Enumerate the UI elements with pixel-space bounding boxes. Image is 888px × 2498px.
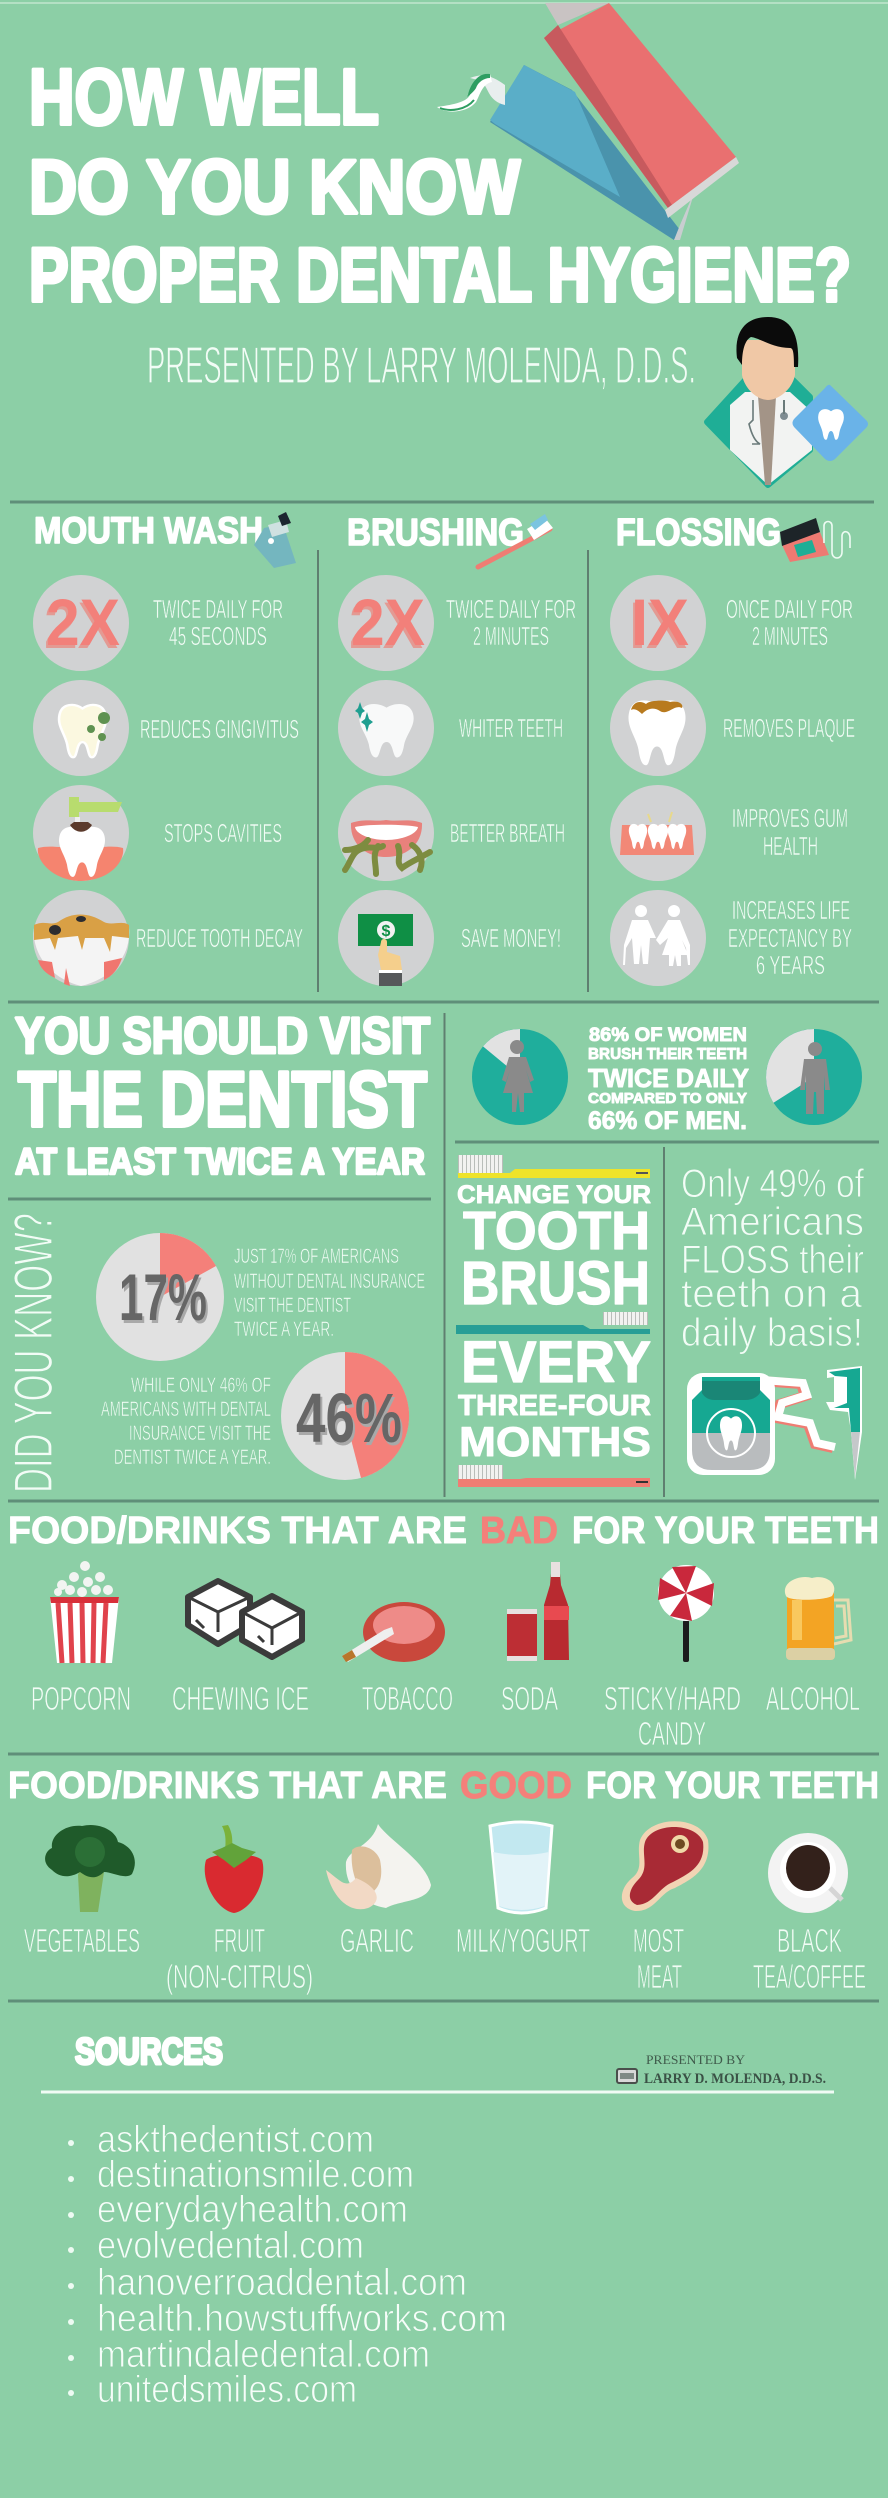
label bbox=[633, 1922, 684, 1995]
title: HOW WELL bbox=[29, 52, 379, 141]
logo: presented by larry d. molenda: LARRY D. MOLENDA, D.D.S. bbox=[644, 2071, 826, 2087]
stat text: TWICE DAILY bbox=[588, 1063, 749, 1093]
list: source links: evolvedental.com bbox=[97, 2225, 364, 2267]
label bbox=[728, 895, 852, 980]
stat text: COMPARED TO ONLY bbox=[588, 1090, 747, 1107]
heading: visit the dentist bbox=[15, 1007, 430, 1182]
text: only 49% floss bbox=[681, 1162, 865, 1355]
chart: 46% pie: 46% bbox=[296, 1379, 402, 1457]
chart: 17% pie: 17% bbox=[121, 1263, 209, 1337]
circle: twice daily bbox=[338, 575, 434, 671]
label: SAVE MONEY! bbox=[461, 923, 561, 953]
circle: money: $ bbox=[382, 923, 391, 940]
icon: ashtray and cigarette bbox=[342, 1602, 445, 1662]
chart: women 86% bbox=[472, 1029, 568, 1125]
list: source links: health.howstuffworks.com bbox=[97, 2298, 507, 2340]
heading: did you know: DID YOU KNOW? bbox=[2, 1213, 64, 1493]
heading: good for your teeth: FOOD/DRINKS THAT ARE bbox=[8, 1765, 447, 1807]
text: change your tooth brush: TOOTH bbox=[463, 1201, 650, 1261]
icon: popcorn bbox=[50, 1561, 119, 1663]
label bbox=[753, 1922, 866, 1995]
circle: white tooth bbox=[338, 680, 434, 776]
icon: floss box bbox=[780, 518, 850, 562]
label: FRUIT bbox=[214, 1922, 265, 1959]
panel: header bbox=[29, 3, 868, 485]
label bbox=[732, 803, 848, 861]
label bbox=[166, 1922, 313, 1995]
circle: money bbox=[338, 890, 434, 986]
label bbox=[446, 594, 576, 651]
circle: elderly couple bbox=[610, 890, 706, 986]
heading: bad for your teeth: FOOD/DRINKS THAT ARE bbox=[8, 1510, 467, 1552]
heading: visit the dentist: THE DENTIST bbox=[18, 1055, 427, 1143]
icon: broccoli bbox=[45, 1825, 135, 1912]
circle: once daily: IX bbox=[629, 588, 687, 662]
text: 17% stat: VISIT THE DENTIST bbox=[234, 1294, 351, 1317]
list: source links: everydayhealth.com bbox=[97, 2189, 408, 2231]
icon: ice cubes bbox=[188, 1581, 302, 1657]
logo: presented by larry d. molenda: PRESENTED BY bbox=[646, 2052, 746, 2067]
icon: meat bbox=[622, 1821, 708, 1911]
icon: mouthwash bottle bbox=[254, 512, 296, 568]
label: BLACK bbox=[777, 1922, 842, 1959]
circle: drill and cavity bbox=[33, 785, 129, 881]
text: every three-four months: THREE-FOUR bbox=[458, 1390, 651, 1422]
label: 45 SECONDS bbox=[169, 621, 267, 651]
panel: did you know bbox=[2, 1213, 425, 1493]
icon: soda can and bottle bbox=[507, 1562, 569, 1661]
title: DO YOU KNOW bbox=[29, 145, 520, 230]
circle: twice daily: 2X bbox=[349, 588, 423, 662]
text: 17% stat bbox=[234, 1245, 425, 1341]
heading: good for your teeth: GOOD bbox=[460, 1765, 572, 1807]
label: (NON-CITRUS) bbox=[166, 1958, 313, 1995]
panel: sources bbox=[41, 2031, 834, 2411]
label: CANDY bbox=[638, 1715, 706, 1752]
text: change your tooth brush: BRUSH bbox=[461, 1249, 650, 1317]
list: source links: destinationsmile.com bbox=[97, 2154, 414, 2196]
label: CHEWING ICE bbox=[172, 1680, 309, 1717]
panel: brushing bbox=[338, 512, 576, 986]
circle: plaque tooth bbox=[610, 680, 706, 776]
chart: 17% pie: 17% bbox=[119, 1260, 207, 1334]
label: REDUCE TOOTH DECAY bbox=[136, 923, 303, 953]
logo: presented by larry d. molenda bbox=[617, 2052, 826, 2087]
chart: 46% pie: 46% bbox=[298, 1382, 404, 1460]
panel: men and women brushing bbox=[472, 1025, 862, 1135]
text: only 49% floss: teeth on a bbox=[681, 1272, 863, 1316]
circle: once daily: IX bbox=[631, 585, 689, 659]
text: 17% stat: JUST 17% OF AMERICANS bbox=[234, 1245, 399, 1268]
label: 2 MINUTES bbox=[473, 621, 549, 651]
label: POPCORN bbox=[31, 1680, 131, 1717]
chart: men 66% bbox=[766, 1029, 862, 1125]
icon: floss pick bbox=[826, 1366, 862, 1480]
label: 2 MINUTES bbox=[752, 621, 828, 651]
icon: toothpaste tubes bbox=[437, 3, 739, 240]
list: source links: hanoverroaddental.com bbox=[97, 2262, 467, 2304]
label: WHITER TEETH bbox=[459, 713, 563, 743]
circle: bad breath mouth bbox=[338, 785, 434, 881]
title bbox=[29, 52, 851, 318]
label: MOST bbox=[633, 1922, 684, 1959]
text: 17% stat: WITHOUT DENTAL INSURANCE bbox=[234, 1270, 425, 1293]
panel: flossing bbox=[610, 512, 855, 986]
text: 46% stat: DENTIST TWICE A YEAR. bbox=[114, 1446, 271, 1469]
circle: twice daily 45 seconds: 2X bbox=[44, 588, 118, 662]
label: REDUCES GINGIVITUS bbox=[140, 714, 299, 744]
heading: bad for your teeth bbox=[8, 1510, 879, 1552]
heading: good for your teeth bbox=[8, 1765, 879, 1807]
label: HEALTH bbox=[763, 831, 818, 861]
icon: garlic bbox=[326, 1824, 431, 1909]
text: every three-four months bbox=[458, 1330, 651, 1465]
heading: brushing: BRUSHING bbox=[347, 512, 524, 554]
text: change your tooth brush: CHANGE YOUR bbox=[457, 1181, 651, 1209]
icon: coral toothbrush bbox=[458, 1465, 650, 1487]
stat text: 86% OF WOMEN bbox=[589, 1025, 747, 1046]
label: STICKY/HARD bbox=[604, 1680, 741, 1717]
text: 46% stat: AMERICANS WITH DENTAL bbox=[101, 1398, 271, 1421]
panel: change your toothbrush bbox=[456, 1155, 651, 1487]
panel: floss statistic bbox=[681, 1162, 865, 1480]
panel: good food and drinks bbox=[8, 1765, 879, 1995]
text: 17% stat: TWICE A YEAR. bbox=[234, 1318, 334, 1341]
label: BETTER BREATH bbox=[450, 818, 565, 848]
text: only 49% floss: daily basis! bbox=[681, 1311, 863, 1355]
text: 46% stat bbox=[101, 1374, 271, 1469]
circle: twice daily: 2X bbox=[351, 585, 425, 659]
heading: visit the dentist: YOU SHOULD VISIT bbox=[15, 1007, 430, 1064]
heading: visit the dentist: AT LEAST TWICE A YEAR bbox=[15, 1141, 425, 1182]
label: MILK/YOGURT bbox=[456, 1922, 590, 1959]
text: 46% stat: WHILE ONLY 46% OF bbox=[131, 1374, 271, 1397]
circle: once daily bbox=[610, 575, 706, 671]
circle: twice daily 45 seconds bbox=[33, 575, 129, 671]
label: TWICE DAILY FOR bbox=[446, 594, 576, 624]
icon: lollipop bbox=[658, 1565, 714, 1662]
stat text: 66% OF MEN. bbox=[588, 1107, 747, 1135]
heading: flossing: FLOSSING bbox=[616, 512, 781, 554]
text: only 49% floss: Americans bbox=[681, 1200, 864, 1244]
icon: glass of milk bbox=[490, 1822, 552, 1913]
stat text bbox=[588, 1025, 749, 1135]
list: source links bbox=[68, 2119, 507, 2411]
list: source links: askthedentist.com bbox=[97, 2119, 374, 2161]
label: GARLIC bbox=[340, 1922, 414, 1959]
icon: yellow toothbrush bbox=[458, 1155, 650, 1178]
stat text: BRUSH THEIR TEETH bbox=[588, 1046, 747, 1063]
panel: mouth wash bbox=[33, 510, 303, 986]
label: TWICE DAILY FOR bbox=[153, 594, 283, 624]
label: 6 YEARS bbox=[756, 950, 825, 980]
icon: dentist bbox=[707, 317, 868, 485]
label: MEAT bbox=[637, 1958, 682, 1995]
icon: floss container bbox=[687, 1373, 835, 1475]
chart: 46% pie bbox=[281, 1352, 409, 1480]
icon: strawberry bbox=[205, 1825, 263, 1913]
text: every three-four months: EVERY bbox=[461, 1330, 651, 1395]
text: every three-four months: MONTHS bbox=[459, 1418, 651, 1465]
label bbox=[726, 594, 853, 651]
chart: 17% pie bbox=[96, 1233, 224, 1361]
label: VEGETABLES bbox=[24, 1922, 140, 1959]
label: TOBACCO bbox=[362, 1680, 453, 1717]
circle: tooth decay bbox=[33, 890, 129, 986]
heading: bad for your teeth: BAD bbox=[480, 1510, 558, 1552]
label bbox=[604, 1680, 741, 1752]
text: 46% stat: INSURANCE VISIT THE bbox=[129, 1422, 271, 1445]
icon: black coffee bbox=[768, 1833, 848, 1913]
icon: toothbrush bbox=[478, 514, 553, 567]
text: change your tooth brush bbox=[457, 1181, 651, 1317]
icon: beer mug bbox=[785, 1577, 851, 1660]
list: source links: unitedsmiles.com bbox=[97, 2369, 357, 2411]
label bbox=[153, 594, 283, 651]
circle: tooth with gingivitis bbox=[33, 680, 129, 776]
circle: healthy gums bbox=[610, 785, 706, 881]
icon: teal toothbrush bbox=[456, 1312, 650, 1334]
label: STOPS CAVITIES bbox=[164, 818, 282, 848]
circle: twice daily 45 seconds: 2X bbox=[46, 585, 120, 659]
list: source links: martindaledental.com bbox=[97, 2334, 430, 2376]
label: SODA bbox=[501, 1680, 558, 1717]
heading: mouth wash: MOUTH WASH bbox=[34, 510, 263, 551]
heading: sources: SOURCES bbox=[75, 2031, 223, 2072]
panel: bad food and drinks bbox=[8, 1510, 879, 1752]
